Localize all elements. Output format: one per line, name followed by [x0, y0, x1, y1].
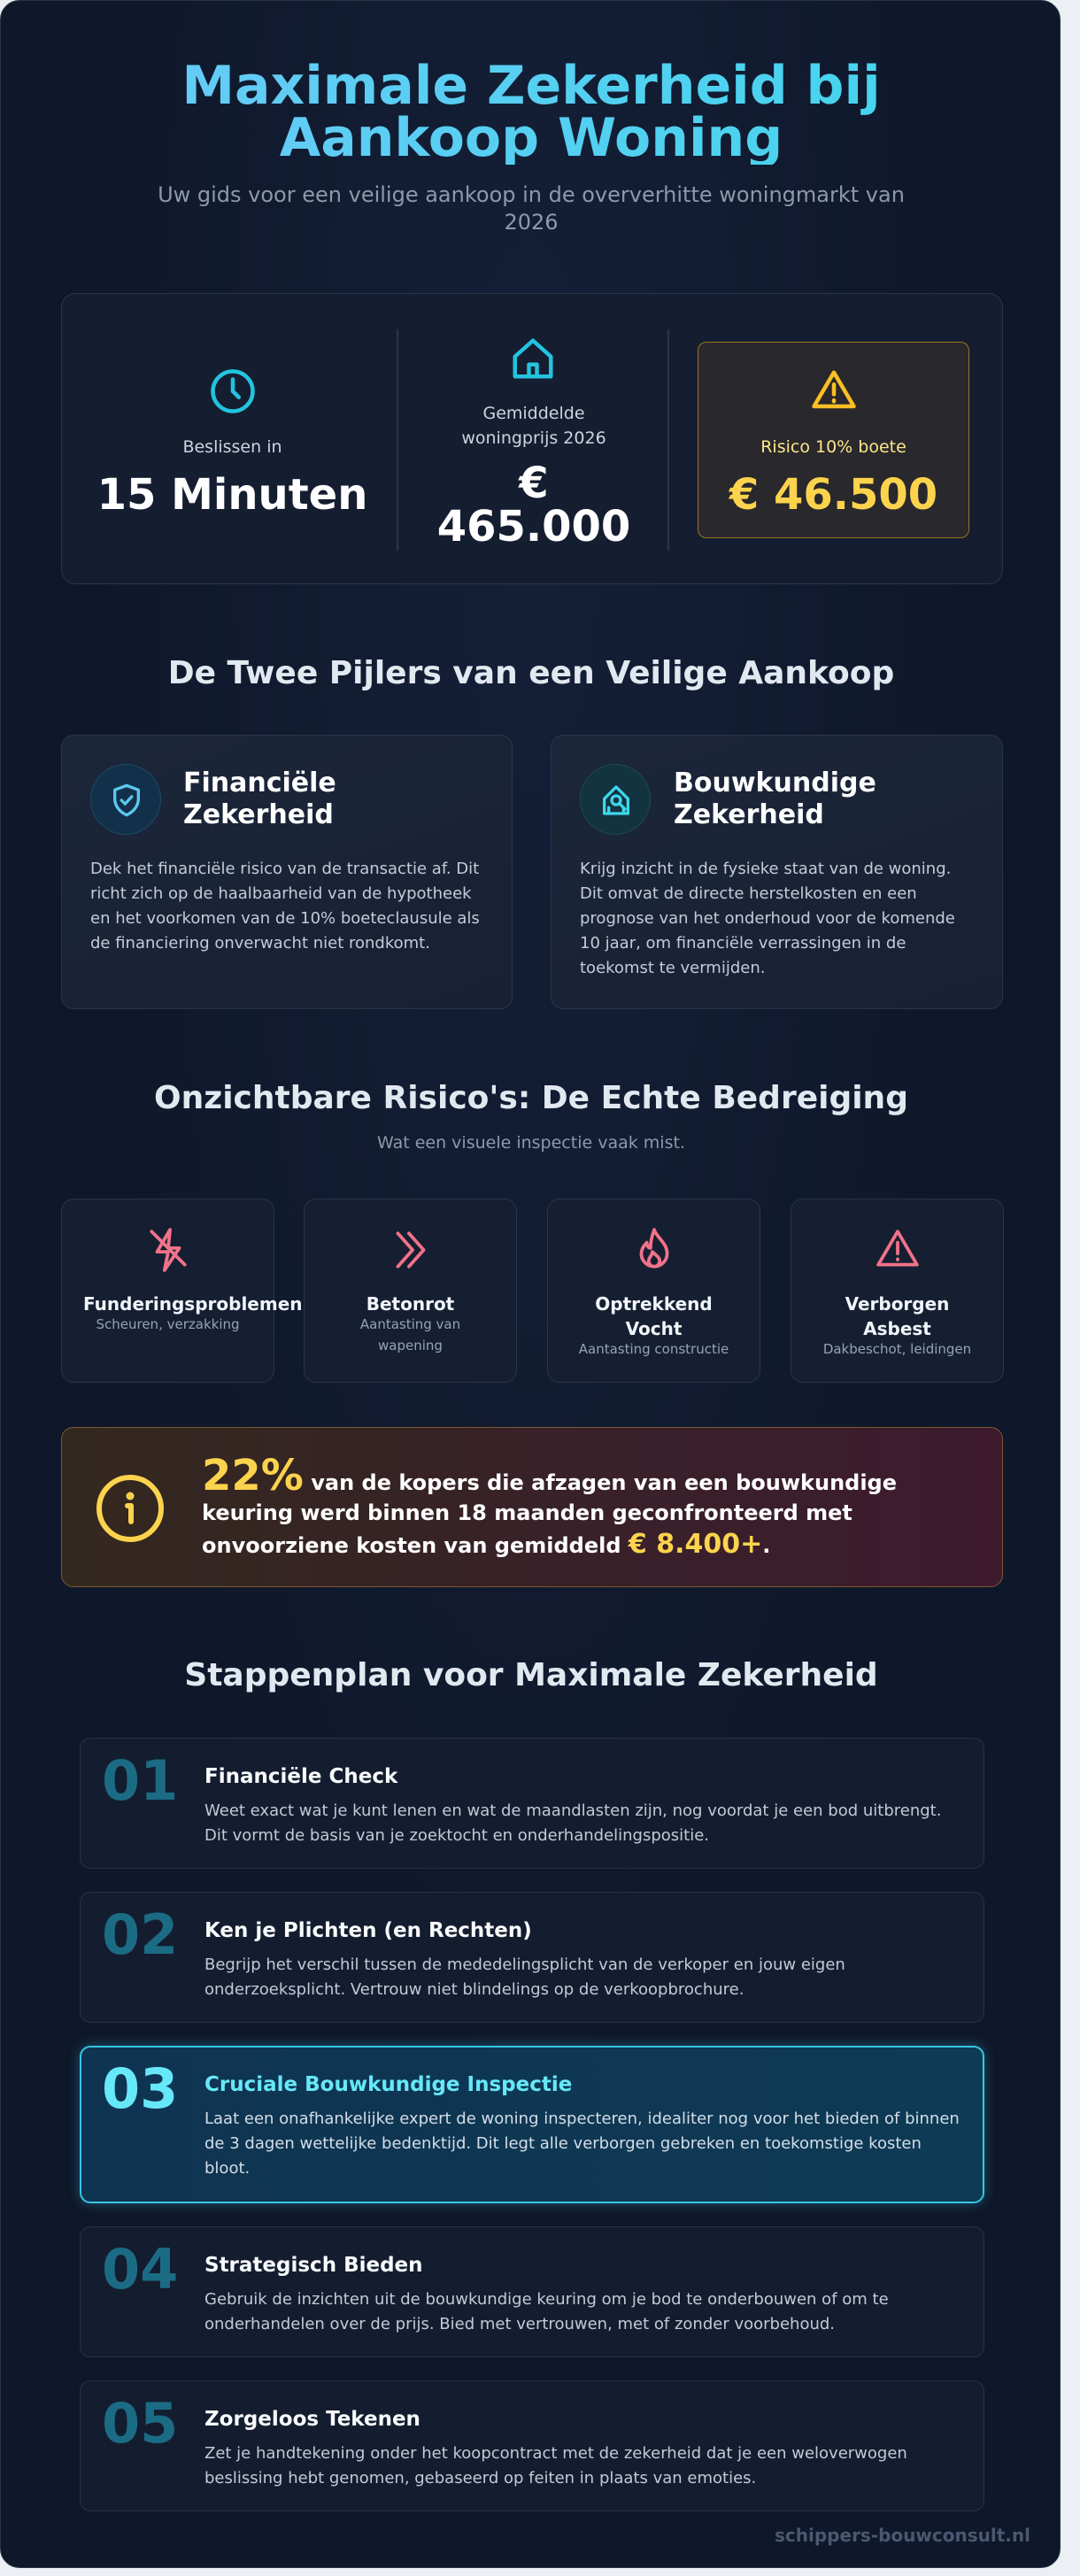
risk card: concrete rot: Aantasting van — [360, 1316, 460, 1332]
step 02: onderzoeksplicht. Vertrouw niet blindelings op de verkoopbrochure. — [204, 1980, 744, 1999]
step 02: Ken je Plichten (en Rechten) — [204, 1919, 532, 1942]
icon: info — [96, 1475, 164, 1542]
step 03 highlighted: de 3 dagen wettelijke bedenktijd. Dit legt alle verborgen gebreken en toekomstige kosten — [204, 2134, 922, 2153]
text — [580, 860, 955, 977]
heading: two pillars: De Twee Pijlers van een Veilige Aankoop — [168, 655, 894, 691]
subheading: Wat een visuele inspectie vaak mist. — [377, 1133, 685, 1153]
text: en het voorkomen van de 10% boeteclausule als — [90, 909, 480, 928]
step 02: Begrijp het verschil tussen de mededelingsplicht van de verkoper en jouw eigen — [204, 1955, 845, 1974]
heading: step plan: Stappenplan voor Maximale Zekerheid — [184, 1657, 878, 1693]
icon: flame — [639, 1228, 669, 1269]
icon: house — [513, 338, 552, 379]
icon: warning — [812, 370, 856, 409]
step 03 highlighted: 03 — [102, 2056, 178, 2121]
risk card: concrete rot: wapening — [378, 1338, 443, 1354]
panel: structural certainty — [551, 735, 1003, 1009]
callout: risk fine: Risico 10% boete — [760, 437, 906, 457]
risk card: concrete rot: Betonrot — [366, 1293, 454, 1315]
step 02: 02 — [102, 1902, 178, 1967]
callout text — [202, 1451, 897, 1560]
stat: average price: Gemiddelde — [482, 404, 585, 423]
title: Maximale Zekerheid bij — [181, 55, 881, 117]
stat: decide time: Beslissen in — [182, 437, 282, 457]
risk card: damp: Optrekkend — [595, 1293, 713, 1315]
step 05: 05 — [102, 2391, 178, 2456]
risk card: foundation: Scheuren, verzakking — [96, 1316, 240, 1332]
icon: warning — [876, 1230, 919, 1266]
heading: Financiële — [183, 767, 336, 798]
heading: hidden risks: Onzichtbare Risico's: De Echte Bedreiging — [154, 1080, 908, 1116]
step 01 — [80, 1738, 984, 1869]
icon: clock — [211, 369, 255, 413]
risk card: asbestos: Verborgen — [845, 1293, 949, 1315]
step 03 highlighted: bloot. — [204, 2159, 250, 2178]
step 05 — [80, 2380, 984, 2511]
heading: Zekerheid — [183, 799, 334, 830]
panel: financial certainty — [61, 735, 513, 1009]
text: Dit omvat de directe herstelkosten en een — [580, 884, 917, 903]
title — [1, 60, 1061, 165]
title: Aankoop Woning — [280, 107, 783, 169]
callout text: 22% van de kopers die afzagen van een bouwkundige — [202, 1451, 897, 1500]
risk card: damp: Vocht — [626, 1318, 682, 1339]
risk card: damp: Aantasting constructie — [579, 1341, 729, 1357]
step 05: beslissing hebt genomen, gebaseerd op feiten in plaats van emoties. — [204, 2469, 756, 2487]
step 01: Weet exact wat je kunt lenen en wat de maandlasten zijn, nog voordat je een bod uitbrengt. — [204, 1801, 941, 1820]
text: toekomst te vermijden. — [580, 959, 765, 977]
text: 10 jaar, om financiële verrassingen in de — [580, 934, 906, 953]
text — [90, 860, 480, 953]
step 04 — [80, 2226, 984, 2357]
step 04: 04 — [102, 2237, 178, 2302]
callout text: onvoorziene kosten van gemiddeld € 8.400+. — [202, 1529, 770, 1560]
callout: 22% statistic — [61, 1427, 1003, 1587]
text: de financiering onverwacht niet rondkomt. — [90, 934, 430, 953]
step 03 highlighted: Cruciale Bouwkundige Inspectie — [204, 2073, 572, 2096]
risk card: foundation: Funderingsproblemen — [83, 1293, 303, 1315]
subtitle: 2026 — [504, 210, 559, 235]
stat: average price — [461, 404, 606, 448]
subtitle: Uw gids voor een veilige aankoop in de oververhitte woningmarkt van — [158, 182, 905, 207]
step 03 highlighted: Laat een onafhankelijke expert de woning inspecteren, idealiter nog voor het bieden of binnen — [204, 2109, 960, 2128]
step 05: Zet je handtekening onder het koopcontract met de zekerheid dat je een weloverwogen — [204, 2444, 907, 2463]
heading — [183, 767, 336, 830]
icon: chevrons — [396, 1231, 425, 1269]
callout text: keuring werd binnen 18 maanden geconfronteerd met — [202, 1500, 852, 1525]
callout: risk fine — [698, 342, 969, 538]
text: Dek het financiële risico van de transactie af. Dit — [90, 860, 479, 878]
risk card: asbestos: Asbest — [863, 1318, 931, 1339]
panel: key stats: 465.000 — [437, 502, 630, 551]
text: richt zich op de haalbaarheid van de hypotheek — [90, 884, 472, 903]
step 01: Dit vormt de basis van je zoektocht en onderhandelingspositie. — [204, 1826, 709, 1845]
stat: average price: woningprijs 2026 — [461, 428, 606, 448]
panel: key stats: 15 Minuten — [97, 470, 367, 520]
step 04: onderhandelen over de prijs. Bied met vertrouwen, met of zonder voorbehoud. — [204, 2315, 835, 2333]
heading — [674, 767, 876, 830]
subtitle — [158, 182, 905, 235]
text: prognose van het onderhoud voor de komende — [580, 909, 955, 928]
step 01: Financiële Check — [204, 1765, 397, 1788]
callout: risk fine: € 46.500 — [729, 470, 937, 520]
step 01: 01 — [102, 1748, 178, 1813]
risk card: asbestos: Dakbeschot, leidingen — [823, 1341, 971, 1357]
step 03 highlighted — [80, 2046, 984, 2203]
footer: website: schippers-bouwconsult.nl — [775, 2525, 1030, 2546]
icon: shield — [90, 764, 161, 835]
risk card: concrete rot — [304, 1199, 517, 1383]
step 05: Zorgeloos Tekenen — [204, 2408, 420, 2431]
icon: house search — [580, 764, 651, 835]
panel: key stats: € — [519, 459, 549, 508]
text: Krijg inzicht in de fysieke staat van de woning. — [580, 860, 951, 878]
heading: Zekerheid — [674, 799, 824, 830]
step 04: Strategisch Bieden — [204, 2254, 423, 2277]
panel: key stats — [61, 293, 1003, 584]
heading: Bouwkundige — [674, 767, 876, 798]
step 04: Gebruik de inzichten uit de bouwkundige keuring om je bod te onderbouwen of om te — [204, 2290, 889, 2309]
step 02 — [80, 1892, 984, 2023]
icon: broken bolt — [150, 1228, 187, 1272]
risk card: foundation — [61, 1199, 274, 1383]
risk card: damp — [547, 1199, 760, 1383]
risk card: asbestos — [791, 1199, 1004, 1383]
